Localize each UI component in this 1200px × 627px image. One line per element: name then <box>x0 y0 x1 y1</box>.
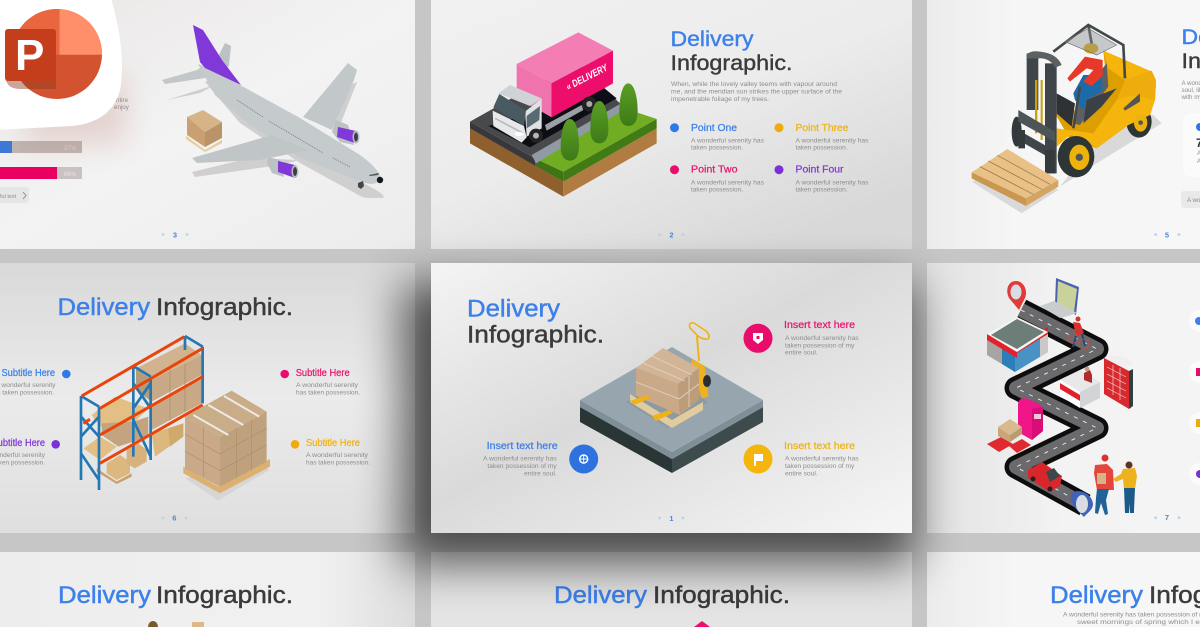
truck chassis and cab <box>493 85 597 143</box>
heading: Infographic. <box>156 582 293 609</box>
point one: A wonderful serenity has <box>691 138 764 144</box>
subtitle: blue left: Subtitle Here <box>2 368 55 379</box>
subtitle: purple left <box>0 438 60 466</box>
callout: blue bottom left <box>483 441 598 477</box>
slide 2: truck <box>431 0 912 249</box>
page number 1: 1 <box>669 514 674 523</box>
point four: A wonderful serenity has <box>796 180 868 186</box>
callout: pink top right: entire soul. <box>785 350 818 357</box>
point three: Point Three <box>796 123 849 134</box>
pallet jack handle <box>689 323 709 398</box>
heading: Infographic. <box>467 322 604 349</box>
callout: blue bottom left: taken possession of my <box>487 463 558 470</box>
heading <box>58 294 293 321</box>
text fragment behind logo: enjoy <box>114 104 130 111</box>
cardboard box and parcels <box>987 419 1031 453</box>
text fragment behind logo: ntire <box>116 97 129 104</box>
pink shape top <box>694 621 710 627</box>
button: useful text <box>0 187 29 203</box>
page number 3: 3 <box>173 230 177 240</box>
point two: Point Two <box>691 164 738 176</box>
bottom-left slide <box>0 552 415 627</box>
callout: yellow bottom right: Insert text here <box>784 441 855 452</box>
callout: pink top right: taken possession of my <box>785 342 855 349</box>
subtitle: yellow right: A wonderful serenity <box>306 452 369 459</box>
bottom-right slide <box>927 552 1200 627</box>
subtitle: yellow right: has taken possession. <box>306 460 370 466</box>
map pin red <box>1007 281 1026 310</box>
text fragment behind logo <box>114 97 130 111</box>
heading: Delivery <box>58 294 150 321</box>
subtitle: pink right <box>280 368 360 396</box>
button <box>1181 191 1200 208</box>
illustration: pallet jack on platform <box>580 323 763 473</box>
truck cargo box: « DELIVERY <box>565 62 611 93</box>
laptop <box>1040 278 1079 318</box>
heading: Delivery <box>554 582 647 609</box>
callout: pink top right: A wonderful serenity has <box>785 335 859 342</box>
slide 3: airplane <box>0 0 415 249</box>
center slide drop shadow <box>402 284 914 564</box>
forklift mast <box>1012 51 1062 173</box>
page number 7: 7 <box>1165 513 1169 522</box>
logo P tile: P <box>15 31 44 80</box>
intro paragraph: When, while the lovely valley teems with vapour around <box>671 81 838 88</box>
progress bar: 86%: 86% <box>64 172 77 178</box>
point three: taken possession. <box>796 145 848 152</box>
subtext <box>1063 612 1200 626</box>
heading <box>670 28 792 75</box>
callout: yellow bottom right: entire soul. <box>785 470 818 477</box>
heading <box>1182 26 1200 73</box>
slide 7: delivery route <box>927 263 1200 533</box>
forklift front wheel <box>1058 114 1147 177</box>
pink mailbox <box>1018 398 1043 440</box>
progress bar: 37%: 37% <box>64 146 77 152</box>
intro paragraph <box>1180 80 1200 101</box>
wooden pallet <box>972 149 1058 206</box>
button: useful text: ful text <box>0 194 17 200</box>
subtitle: pink right: Subtitle Here <box>296 368 350 379</box>
blue map pin <box>1071 491 1093 517</box>
logo: PowerPoint badge <box>0 0 122 130</box>
page number 6: 6 <box>172 514 176 522</box>
heading: Infographic. <box>670 52 792 75</box>
callout: pink top right <box>744 320 859 357</box>
heading <box>554 582 790 609</box>
illustration: warehouse rack with boxes <box>81 336 270 501</box>
page number 2 <box>658 230 684 240</box>
boxes on shelves <box>83 343 202 484</box>
callout: yellow bottom right: A wonderful serenity has <box>785 456 859 463</box>
progress bar: 37% <box>0 141 82 153</box>
slide 1: center feature slide <box>431 263 912 533</box>
page number 5 <box>1154 230 1180 240</box>
callout: blue bottom left: A wonderful serenity has <box>483 456 557 463</box>
heading: Delivery <box>1050 582 1143 609</box>
stat card <box>1183 113 1200 177</box>
counter with clerk <box>1060 366 1100 408</box>
illustration: delivery truck on ground block <box>470 32 657 197</box>
logo tile shadow <box>26 74 126 144</box>
figure tops <box>148 621 204 627</box>
illustration: winding road <box>987 278 1137 517</box>
page number 6 <box>162 514 187 522</box>
boxes <box>636 348 699 415</box>
page number 1 <box>658 514 684 523</box>
slide 5: forklift <box>927 0 1200 249</box>
heading: Delivery <box>467 296 560 322</box>
side tabs <box>1189 310 1200 485</box>
callout: blue bottom left: entire soul. <box>524 470 557 477</box>
callout: blue bottom left: Insert text here <box>487 441 558 452</box>
progress bar: 86% <box>0 167 82 179</box>
subtitle: yellow right <box>291 438 370 466</box>
small pallet of boxes <box>186 110 222 152</box>
courier and customer <box>1094 454 1137 515</box>
point two: A wonderful serenity has <box>691 180 764 186</box>
jack forks <box>630 395 673 421</box>
illustration: airplane <box>162 25 384 198</box>
trees <box>561 83 638 161</box>
large pallet with boxes <box>183 391 270 501</box>
callout: yellow bottom right <box>744 441 859 477</box>
rack frame <box>81 336 203 490</box>
heading: Infographic. <box>156 294 293 321</box>
truck cargo box <box>517 32 613 117</box>
slide 6: warehouse racks <box>0 263 415 533</box>
point four: Point Four <box>796 164 844 176</box>
bottom-center slide <box>431 552 912 627</box>
courier on bicycle <box>1068 316 1089 349</box>
point one: Point One <box>691 123 737 134</box>
red delivery van <box>1028 462 1062 492</box>
heading: Infographic. <box>653 582 790 609</box>
point two: taken possession. <box>691 187 743 194</box>
subtitle: blue left <box>0 368 71 396</box>
point three: A wonderful serenity has <box>796 138 868 144</box>
heading <box>467 296 604 349</box>
point three <box>774 123 868 152</box>
page number 7 <box>1154 513 1180 522</box>
subtitle: pink right: A wonderful serenity <box>296 382 359 389</box>
point one <box>670 123 764 152</box>
point four: taken possession. <box>796 187 848 194</box>
illustration: forklift with pallet <box>972 25 1162 213</box>
heading <box>1050 582 1200 609</box>
forklift body <box>1055 43 1156 148</box>
heading: Delivery <box>58 582 151 609</box>
intro paragraph <box>671 81 843 103</box>
intro paragraph: me, and the meridian sun strikes the upper surface of the <box>671 88 843 96</box>
heading: Delivery <box>670 28 754 51</box>
subtitle: yellow right: Subtitle Here <box>306 438 360 449</box>
logo circle quadrants <box>12 9 102 99</box>
point one: taken possession. <box>691 145 743 152</box>
point two <box>670 164 764 194</box>
post office building <box>987 317 1048 372</box>
roll cage <box>1053 25 1125 128</box>
page number 5: 5 <box>1165 230 1169 240</box>
callout: pink top right: Insert text here <box>784 320 855 331</box>
subtitle: pink right: has taken possession. <box>296 390 360 396</box>
intro paragraph: impenetrable foliage of my trees. <box>671 96 769 103</box>
pallet <box>630 394 703 428</box>
page number 3 <box>162 230 188 240</box>
point four <box>774 164 868 194</box>
parcel locker <box>1104 355 1133 409</box>
page number 2: 2 <box>669 230 674 240</box>
callout: yellow bottom right: taken possession of my <box>785 463 855 470</box>
heading <box>58 582 293 609</box>
